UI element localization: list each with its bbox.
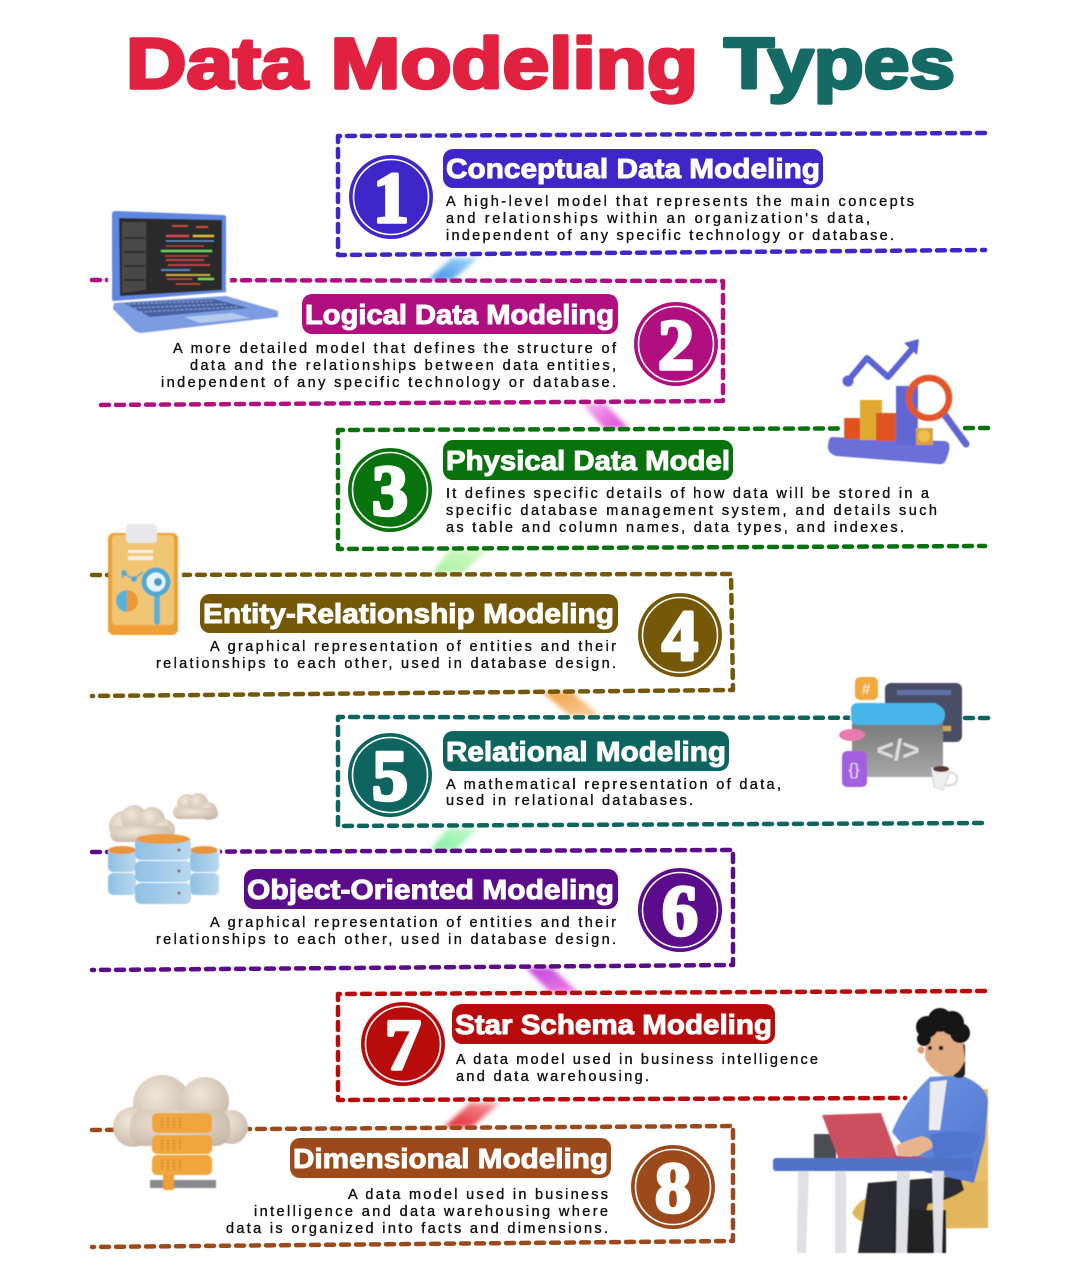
- number badge 1: 1: [373, 158, 409, 238]
- number badge 3: 3: [372, 451, 408, 531]
- panel: 7 star schema: [338, 991, 985, 1100]
- description 4: [156, 639, 616, 672]
- description 2: [161, 341, 617, 391]
- heading 2: Logical Data Modeling: [305, 299, 614, 330]
- number badge 5: 5: [372, 736, 408, 816]
- number badge 1: [349, 155, 433, 239]
- panel: 4 entity-relationship: [92, 574, 733, 696]
- number badge 7: 7: [385, 1005, 421, 1085]
- connector: 6 to 7: [526, 968, 578, 992]
- description 7: A data model used in business intelligence: [456, 1052, 818, 1068]
- description 4: relationships to each other, used in database design.: [156, 656, 616, 672]
- heading 8: Dimensional Modeling: [293, 1143, 608, 1174]
- number badge 8: 8: [655, 1148, 691, 1228]
- panel: 6 object-oriented: [92, 850, 733, 970]
- description 1: A high-level model that represents the main concepts: [446, 194, 914, 210]
- connector: 4 to 5: [542, 692, 600, 716]
- description 3: as table and column names, data types, and indexes.: [446, 520, 904, 536]
- panel: 8 dimensional: [92, 1126, 733, 1247]
- number badge 6: 6: [662, 871, 698, 951]
- heading 6: Object-Oriented Modeling: [247, 874, 614, 905]
- description 8: intelligence and data warehousing where: [254, 1204, 608, 1220]
- description 1: [446, 194, 914, 244]
- connector: 7 to 8: [444, 1103, 500, 1127]
- description 5: [446, 777, 781, 809]
- number badge 6: [638, 868, 722, 952]
- number badge 8: [631, 1145, 715, 1229]
- panel: 2 logical: [92, 280, 723, 405]
- number badge 4: [638, 593, 722, 677]
- icon: laptop: [108, 211, 278, 333]
- description 8: A data model used in business: [348, 1187, 608, 1203]
- heading 3: Physical Data Model: [446, 445, 730, 476]
- connector: 3 to 4: [432, 550, 488, 573]
- description 6: [156, 915, 616, 948]
- description 3: It defines specific details of how data will be stored in a: [446, 486, 930, 502]
- description 7: and data warehousing.: [456, 1069, 649, 1085]
- description 3: [446, 486, 937, 536]
- heading 7: Star Schema Modeling: [455, 1009, 772, 1040]
- description 6: relationships to each other, used in database design.: [156, 932, 616, 948]
- description 5: used in relational databases.: [446, 793, 693, 809]
- panel: 3 physical: [338, 428, 988, 549]
- icon: cloud server: [113, 1075, 248, 1190]
- icon: clipboard: [108, 524, 182, 635]
- icon: chart with magnifier: [828, 339, 966, 464]
- number badge 3: [348, 448, 432, 532]
- connector: 1 to 2: [428, 258, 478, 280]
- icon: person at desk: [773, 1008, 988, 1253]
- icon: code window: </>: [876, 734, 920, 767]
- description 1: independent of any specific technology or database.: [446, 228, 894, 244]
- icon: code window: #: [862, 681, 871, 698]
- title: [126, 25, 955, 104]
- description 6: A graphical representation of entities and their: [210, 915, 616, 931]
- number badge 7: [361, 1002, 445, 1086]
- panel: 5 relational: [338, 717, 988, 826]
- number badge 2: [634, 302, 718, 386]
- icon: code window: [839, 677, 962, 790]
- description 2: independent of any specific technology or database.: [161, 375, 616, 391]
- description 7: [456, 1052, 818, 1085]
- panel: 1 conceptual: [338, 133, 985, 255]
- icon: database servers and clouds: [108, 793, 220, 904]
- description 2: A more detailed model that defines the structure of: [173, 341, 617, 357]
- description 2: data and the relationships between data entities,: [190, 358, 616, 374]
- description 8: data is organized into facts and dimensions.: [226, 1221, 608, 1237]
- description 8: [226, 1187, 608, 1237]
- connector: 2 to 3: [582, 404, 628, 428]
- title: Data Modeling: [126, 25, 698, 104]
- number badge 2: 2: [658, 305, 694, 385]
- icon: code window: {}: [848, 760, 860, 779]
- description 1: and relationships within an organization's data,: [446, 211, 870, 227]
- number badge 4: 4: [662, 596, 698, 676]
- heading 4: Entity-Relationship Modeling: [203, 598, 614, 629]
- connector: 5 to 6: [430, 828, 478, 850]
- number badge 5: [348, 733, 432, 817]
- description 4: A graphical representation of entities and their: [210, 639, 616, 655]
- title: Types: [724, 25, 955, 104]
- heading 1: Conceptual Data Modeling: [446, 153, 820, 184]
- description 5: A mathematical representation of data,: [446, 777, 781, 793]
- heading 5: Relational Modeling: [446, 736, 726, 767]
- description 3: specific database management system, and details such: [446, 503, 937, 519]
